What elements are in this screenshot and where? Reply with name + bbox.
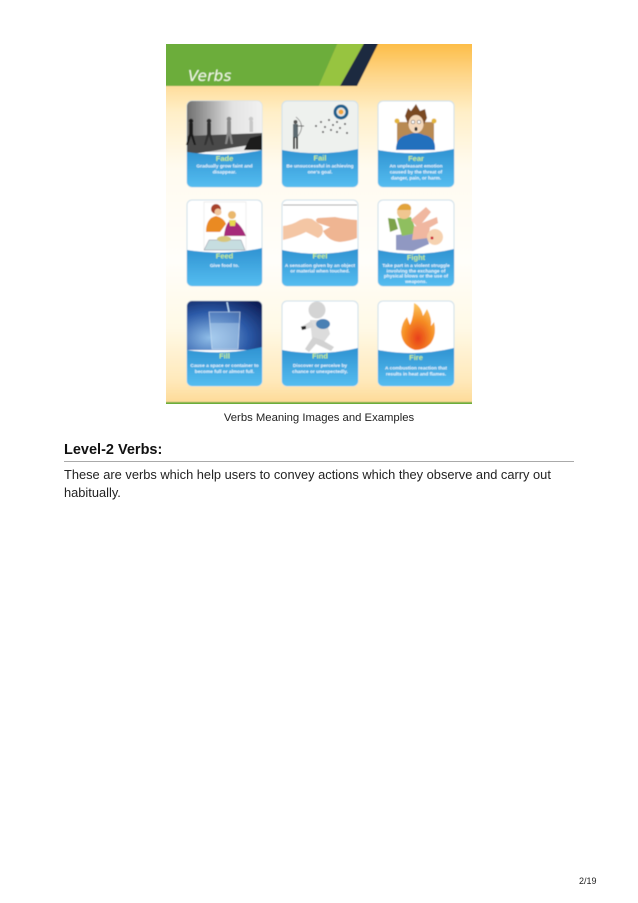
card: Fire: A combustion reaction that [385,366,447,372]
card: Fill: Fill [219,352,230,360]
card: Feed: Feed [216,252,234,261]
card: Feel: Feel [312,252,328,261]
icon: 3D figure with magnifying glass [301,302,334,352]
card: Fail: Be unsuccessful in achieving [286,164,354,170]
card: Fail: Fail [314,154,326,162]
card: Feel: A sensation given by an object [285,263,355,269]
icon: archer and target [293,104,348,149]
card: Find: Discover or perceive by [293,363,347,369]
body paragraph [64,467,551,500]
card: Fade: disappear. [213,170,236,176]
card: Find: chance or unexpectedly. [292,369,348,375]
card: Fade: Gradually grow faint and [196,164,253,170]
card: Fight: physical blows or the use of [384,274,449,280]
card: Fade [186,101,262,187]
card: Fail: one's goal. [308,170,332,176]
heading rule [64,461,574,462]
card: Fill: Cause a space or container to [190,363,259,369]
card: Fight: Fight [407,253,426,262]
card: Feel [282,200,358,286]
card: Fear: danger, pain, or harm. [391,176,441,182]
card: Fill: become full or almost full. [195,369,254,375]
body paragraph: These are verbs which help users to convey actions which they observe and carry out [64,467,551,482]
poster background [160,38,478,410]
card: Fade: Fade [216,154,233,163]
icon: mother feeding child [204,202,246,250]
card: Feed [187,200,262,286]
bottom green strip [160,402,478,410]
card: Fear [378,101,454,187]
icon: two fighting children [388,204,443,251]
icon: frightened person in bed [394,104,436,150]
card: Fight [378,200,454,286]
card: Feel: or material when touched. [290,269,350,275]
page number: 2/19 [579,876,597,886]
card: Feed: Give food to. [210,263,239,269]
icon: glass of water [209,302,240,349]
card: Find [282,301,358,386]
card: Fear: An unpleasant emotion [389,164,443,170]
card: Fire: Fire [409,353,423,362]
icon: flame [401,303,435,350]
card: Fire [378,301,454,386]
card: Fear: Fear [408,154,424,163]
card: Fear: caused by the threat of [390,169,443,175]
header banner [160,38,381,86]
card: Fire: results in heat and flames. [386,372,446,378]
icon: touching hands [283,217,357,242]
icon: walking figures [186,119,196,145]
card: Fight: weapons. [404,280,427,285]
card: Fight: Take part in a violent struggle [382,263,450,269]
card: Fight: involving the exchange of [387,268,446,274]
section heading: Level-2 Verbs: [64,442,162,458]
card: Find: Find [312,352,328,360]
card: Fail [282,101,358,187]
card: Fill [187,301,262,386]
infographic: verbs poster [166,44,472,404]
caption: Verbs Meaning Images and Examples [224,412,414,424]
body paragraph: habitually. [64,485,121,500]
title: Verbs [188,67,232,85]
